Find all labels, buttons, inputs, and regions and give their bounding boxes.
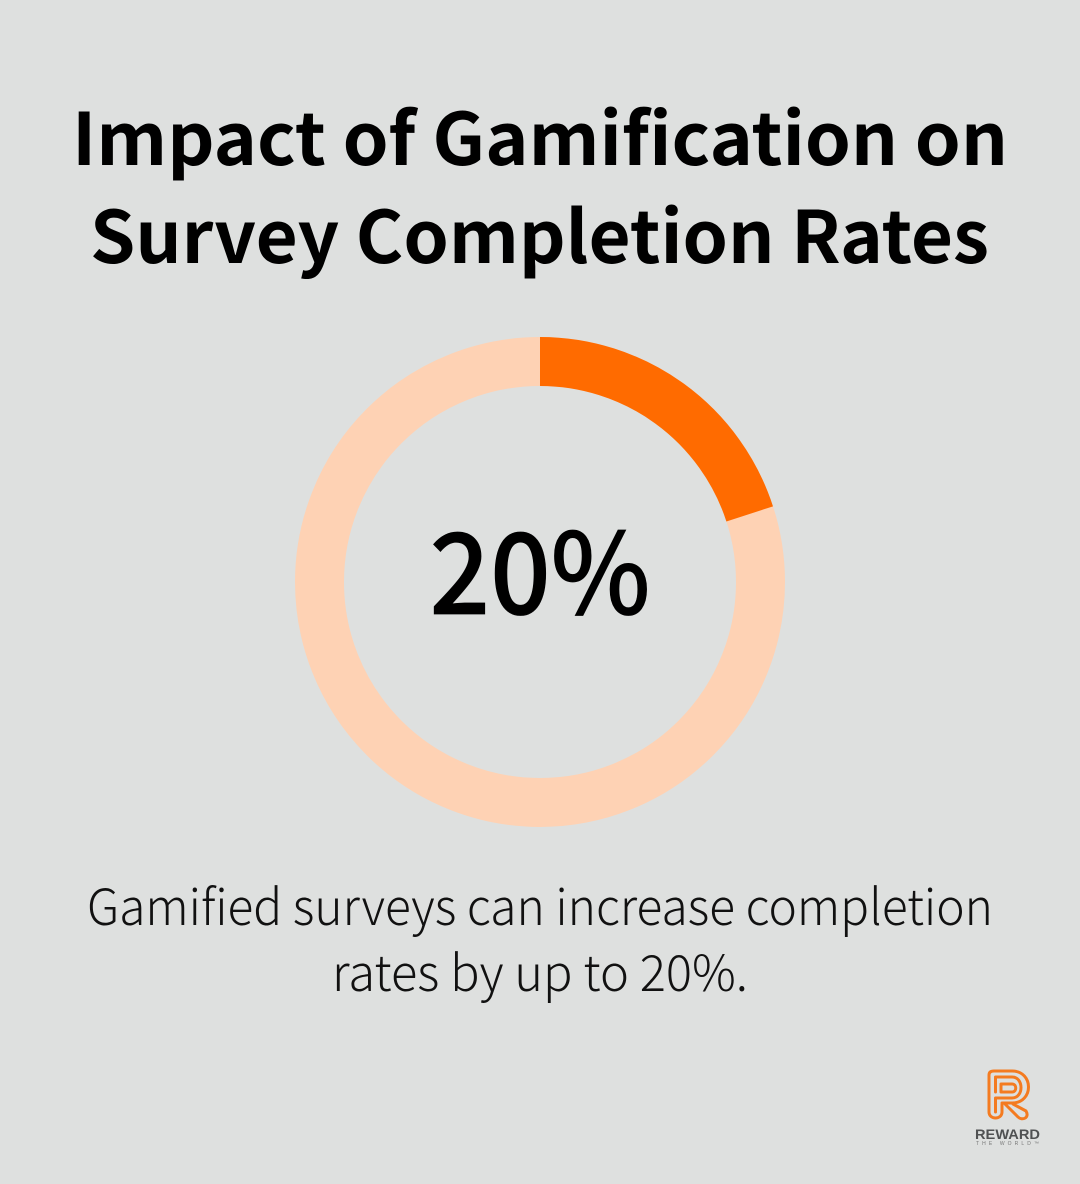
description text bbox=[87, 868, 993, 1006]
description text: Gamified surveys can increase completion bbox=[87, 868, 993, 940]
center value: 20% bbox=[430, 485, 650, 647]
icon: R mark bbox=[989, 1071, 1028, 1119]
title bbox=[72, 81, 1008, 284]
title: Impact of Gamification on bbox=[72, 81, 1008, 186]
donut chart: 20 percent bbox=[320, 362, 760, 802]
logo wordmark: REWARD bbox=[975, 1126, 1040, 1142]
description text: rates by up to 20%. bbox=[332, 934, 748, 1006]
logo tagline: THE WORLD™ bbox=[976, 1141, 1039, 1147]
title: Survey Completion Rates bbox=[90, 179, 989, 284]
donut track bbox=[320, 362, 760, 802]
logo: Reward the World bbox=[975, 1071, 1040, 1147]
donut highlighted segment bbox=[540, 362, 750, 514]
